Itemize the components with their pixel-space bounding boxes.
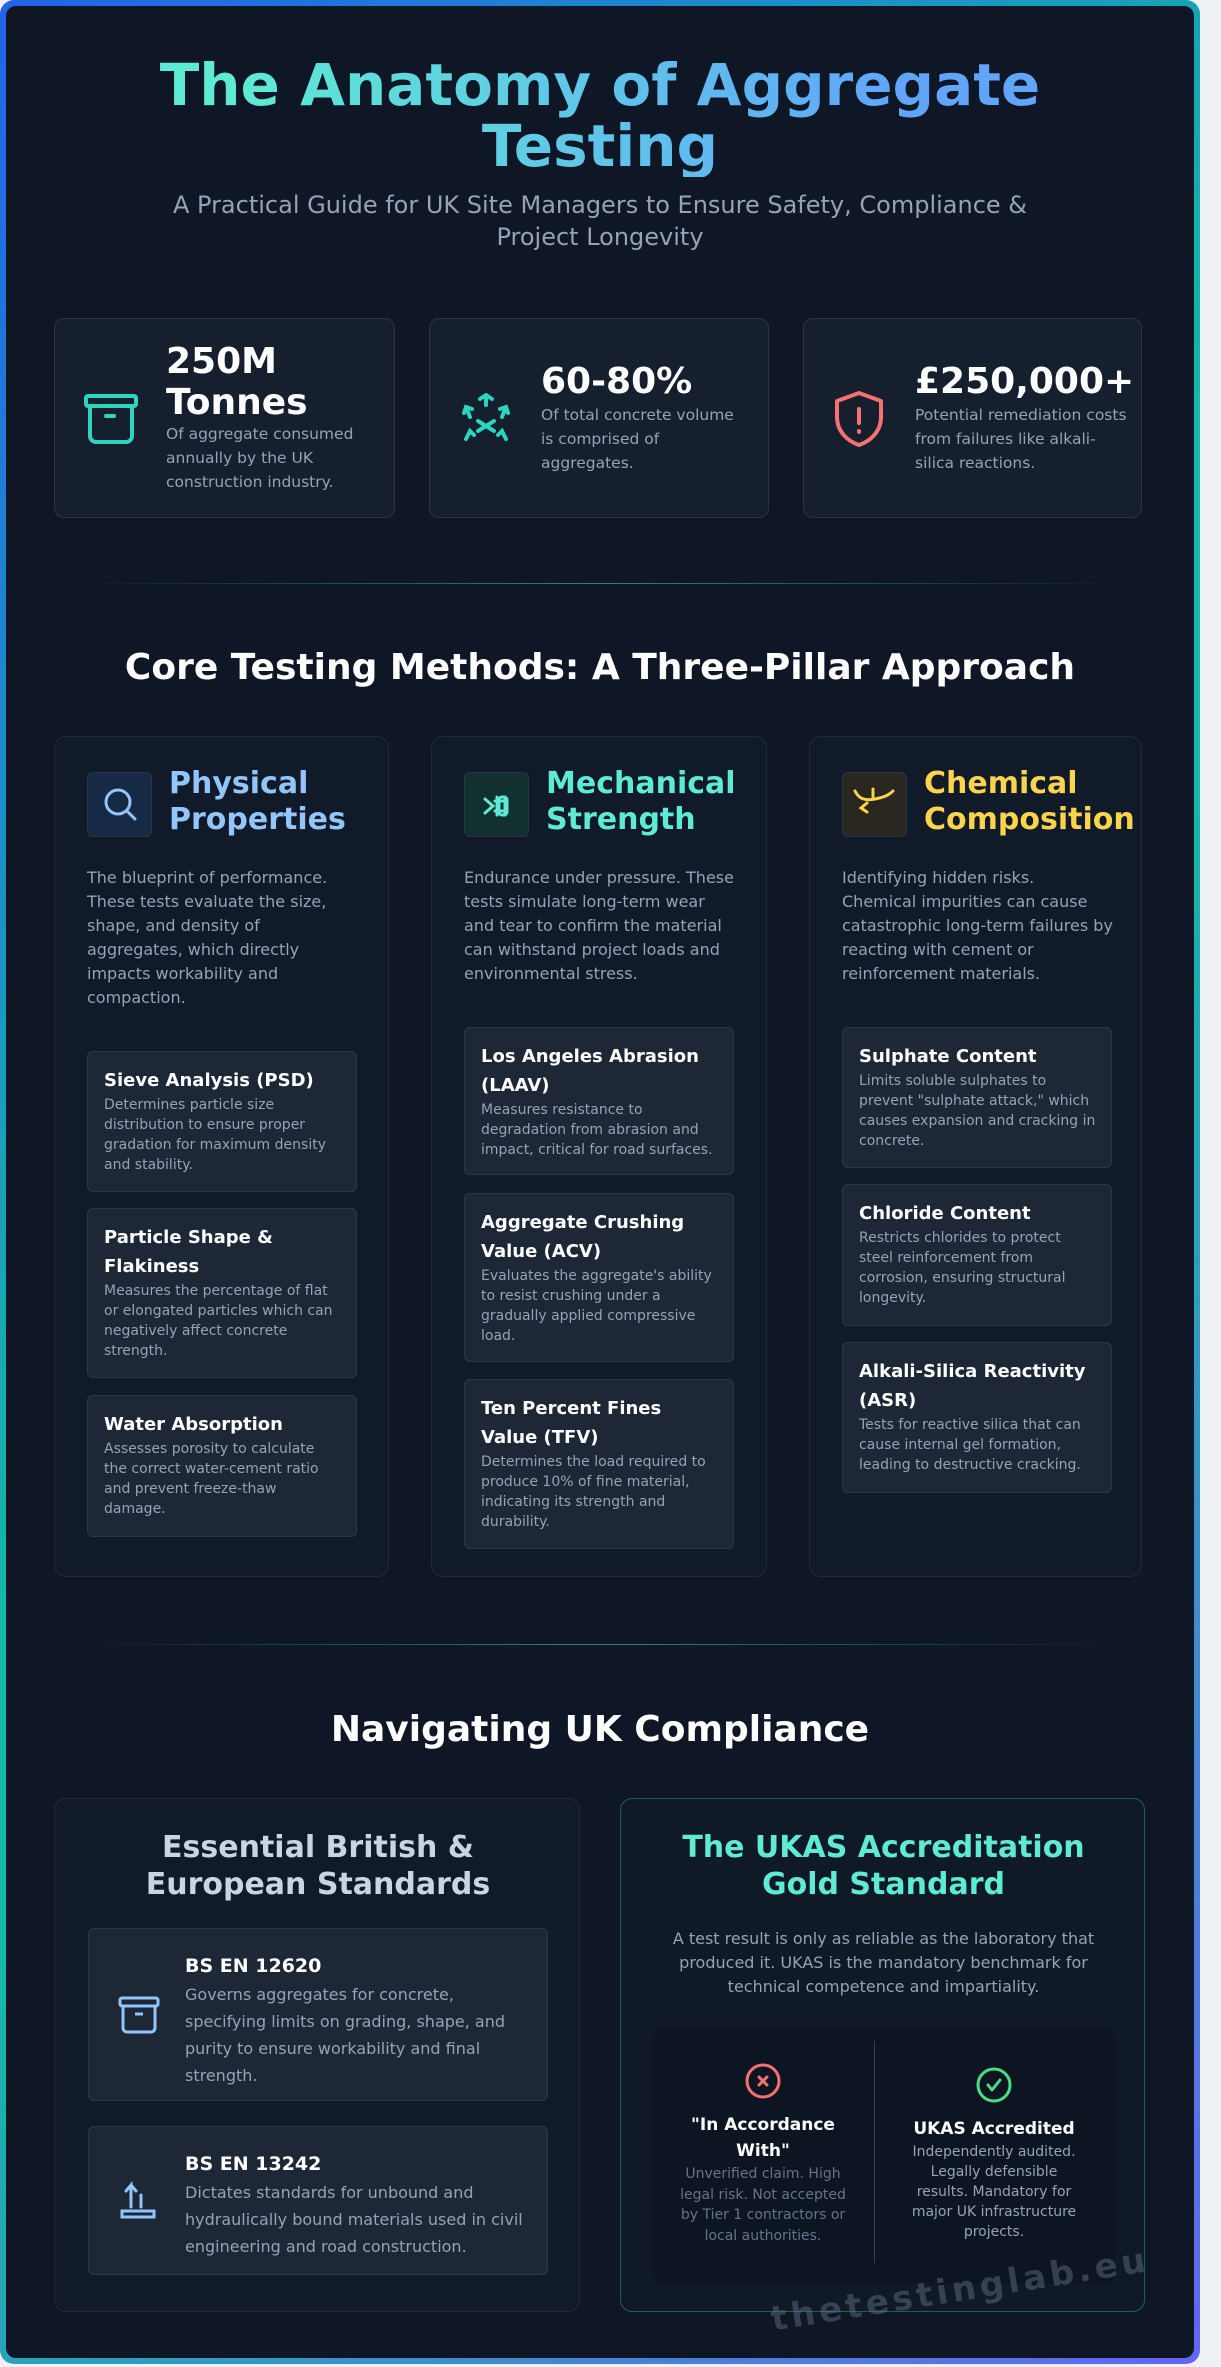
stat card: 60-80%: 60-80% bbox=[541, 361, 692, 402]
panel: chemical composition: Identifying hidden risks. bbox=[842, 868, 1034, 887]
heading: UKAS bbox=[682, 1830, 1085, 1902]
card: particle shape bbox=[87, 1208, 357, 1378]
panel: physical properties: shape, and density of bbox=[87, 916, 260, 935]
panel: mechanical strength: Mechanical bbox=[546, 766, 736, 801]
panel: chemical composition: catastrophic long-term failures by bbox=[842, 916, 1113, 935]
card: ACV: Evaluates the aggregate's ability to resist crushing under a gradually applied compressive load. bbox=[481, 1268, 712, 1344]
panel: physical properties bbox=[54, 736, 389, 1577]
panel: mechanical strength bbox=[431, 736, 767, 1577]
panel: UKAS bbox=[620, 1798, 1145, 2312]
panel: mechanical strength: tests simulate long-term wear bbox=[464, 892, 705, 911]
panel: mechanical strength: environmental stress. bbox=[464, 964, 638, 983]
card: chloride: Chloride Content bbox=[859, 1203, 1031, 1224]
heading: standards: Essential British & bbox=[162, 1830, 474, 1865]
card: BS EN 13242 bbox=[88, 2126, 548, 2275]
stat card: £250,000+: £250,000+ bbox=[915, 361, 1134, 402]
column: in accordance with: Unverified claim. High legal risk. Not accepted by Tier 1 contractors or local authorities. bbox=[680, 2166, 846, 2244]
heading: core testing methods: Core Testing Methods: A Three-Pillar Approach bbox=[125, 647, 1075, 688]
column: in accordance with: With" bbox=[736, 2141, 790, 2161]
subtitle bbox=[173, 191, 1027, 251]
column: in accordance with: "In Accordance bbox=[691, 2115, 835, 2135]
panel: chemical composition: reinforcement materials. bbox=[842, 964, 1040, 983]
icon: dumbbell bbox=[464, 772, 529, 837]
card: sulphate: Limits soluble sulphates to bbox=[859, 1073, 1046, 1089]
comparison box bbox=[653, 2028, 1115, 2284]
panel: physical properties: aggregates, which directly bbox=[87, 940, 299, 959]
card: BS EN 13242: BS EN 13242 bbox=[185, 2153, 321, 2175]
card: BS EN 12620: Governs aggregates for concrete, specifying limits on grading, shape, and purity to ensure workability and final strength. bbox=[185, 1985, 505, 2085]
card: water absorption: Assesses porosity to calculate the correct water-cement ratio and prevent freeze-thaw damage. bbox=[104, 1441, 319, 1517]
stat card: 60-80%: Of total concrete volume is comprised of aggregates. bbox=[541, 406, 734, 472]
panel: chemical composition: Chemical impurities can cause bbox=[842, 892, 1087, 911]
card: BS EN 13242: Dictates standards for unbound and hydraulically bound materials used in civil engineering and road construction. bbox=[185, 2183, 523, 2256]
icon: magnifier bbox=[87, 772, 152, 837]
panel: mechanical strength: can withstand project loads and bbox=[464, 940, 720, 959]
stat card: £250,000+: Potential remediation costs from failures like alkali-silica reactions. bbox=[915, 406, 1127, 472]
title bbox=[0, 55, 1200, 177]
card: ACV bbox=[464, 1193, 734, 1362]
card: sieve analysis bbox=[87, 1051, 357, 1192]
icon: archive box bbox=[84, 394, 138, 444]
panel: physical properties: impacts workability and bbox=[87, 964, 278, 983]
card: LAAV: Los Angeles Abrasion (LAAV) bbox=[481, 1046, 699, 1096]
stat card: 250M: Of aggregate consumed annually by the UK construction industry. bbox=[166, 425, 353, 491]
panel: chemical composition: Chemical bbox=[924, 766, 1078, 801]
icon: shield warning bbox=[835, 391, 883, 447]
panel: mechanical strength: and tear to confirm the material bbox=[464, 916, 722, 935]
card: chloride bbox=[842, 1184, 1112, 1326]
subtitle: Project Longevity bbox=[496, 223, 704, 251]
column: in accordance with bbox=[680, 2064, 846, 2244]
column: UKAS accredited: Independently audited. Legally defensible results. Mandatory for major UK infrastructure projects. bbox=[912, 2144, 1076, 2240]
panel: mechanical strength: Endurance under pressure. These bbox=[464, 868, 734, 887]
card: particle shape: Measures the percentage of flat or elongated particles which can negatively affect concrete strength. bbox=[104, 1283, 333, 1359]
stat card: 250M: Tonnes bbox=[166, 382, 308, 423]
panel: chemical composition: reacting with cement or bbox=[842, 940, 1034, 959]
panel: standards bbox=[54, 1798, 580, 2312]
panel: physical properties: compaction. bbox=[87, 988, 186, 1007]
text: UKAS intro: A test result is only as reliable as the laboratory that produced it. UKAS is the mandatory benchmark for technical competence and impartiality. bbox=[673, 1929, 1094, 1996]
panel: physical properties: These tests evaluate the size, bbox=[87, 892, 326, 911]
card: particle shape: Particle Shape & Flakiness bbox=[104, 1227, 273, 1277]
card: BS EN 12620 bbox=[88, 1928, 548, 2101]
stat card: 60-80% bbox=[429, 318, 769, 518]
icon: recycle bbox=[462, 393, 510, 442]
card: ACV: Aggregate Crushing Value (ACV) bbox=[481, 1212, 684, 1262]
panel: chemical composition: Composition bbox=[924, 802, 1135, 837]
stat card: £250,000+ bbox=[803, 318, 1142, 518]
panel: physical properties: Properties bbox=[169, 802, 346, 837]
card: sulphate: causes expansion and cracking in bbox=[859, 1113, 1095, 1129]
card: LAAV bbox=[464, 1027, 734, 1175]
card: sulphate: concrete. bbox=[859, 1133, 924, 1149]
heading: standards bbox=[146, 1830, 490, 1902]
subtitle: A Practical Guide for UK Site Managers to Ensure Safety, Compliance & bbox=[173, 191, 1027, 219]
card: sieve analysis: Sieve Analysis (PSD) bbox=[104, 1070, 314, 1091]
card: TFV: Determines the load required to produce 10% of fine material, indicating its strength and durability. bbox=[481, 1454, 706, 1530]
panel: physical properties: The blueprint of performance. bbox=[87, 868, 327, 887]
card: water absorption: Water Absorption bbox=[104, 1414, 283, 1435]
card: sieve analysis: Determines particle size distribution to ensure proper gradation for maximum density and stability. bbox=[104, 1097, 326, 1173]
heading: UKAS: The UKAS Accreditation bbox=[682, 1830, 1085, 1865]
card: TFV: Ten Percent Fines Value (TFV) bbox=[481, 1398, 661, 1448]
card: BS EN 12620: BS EN 12620 bbox=[185, 1955, 321, 1977]
card: ASR bbox=[842, 1342, 1112, 1493]
title: The Anatomy of Aggregate bbox=[160, 51, 1040, 119]
icon: chemical bbox=[842, 772, 907, 837]
panel: chemical composition bbox=[809, 736, 1142, 1577]
card: chloride: Restricts chlorides to protect steel reinforcement from corrosion, ensuring structural longevity. bbox=[859, 1230, 1066, 1306]
stat card: 250M: 250M bbox=[166, 341, 277, 382]
title: Testing bbox=[482, 112, 718, 180]
card: sulphate: Sulphate Content bbox=[859, 1046, 1036, 1067]
card: ASR: Tests for reactive silica that can cause internal gel formation, leading to destructive cracking. bbox=[859, 1417, 1081, 1473]
stat card: 250M bbox=[54, 318, 395, 518]
card: LAAV: Measures resistance to degradation from abrasion and impact, critical for road surfaces. bbox=[481, 1102, 713, 1158]
card: TFV bbox=[464, 1379, 734, 1549]
watermark: thetestinglab.eu bbox=[768, 2240, 1152, 2340]
card: water absorption bbox=[87, 1395, 357, 1537]
card: ASR: Alkali-Silica Reactivity (ASR) bbox=[859, 1361, 1086, 1411]
panel: mechanical strength: Strength bbox=[546, 802, 696, 837]
heading: standards: European Standards bbox=[146, 1867, 490, 1902]
column: UKAS accredited bbox=[912, 2068, 1076, 2240]
column: UKAS accredited: UKAS Accredited bbox=[913, 2119, 1075, 2139]
heading: navigating UK compliance: Navigating UK Compliance bbox=[331, 1709, 869, 1750]
panel: physical properties: Physical bbox=[169, 766, 308, 801]
card: sulphate bbox=[842, 1027, 1112, 1168]
heading: UKAS: Gold Standard bbox=[762, 1867, 1005, 1902]
card: sulphate: prevent "sulphate attack," which bbox=[859, 1093, 1089, 1109]
